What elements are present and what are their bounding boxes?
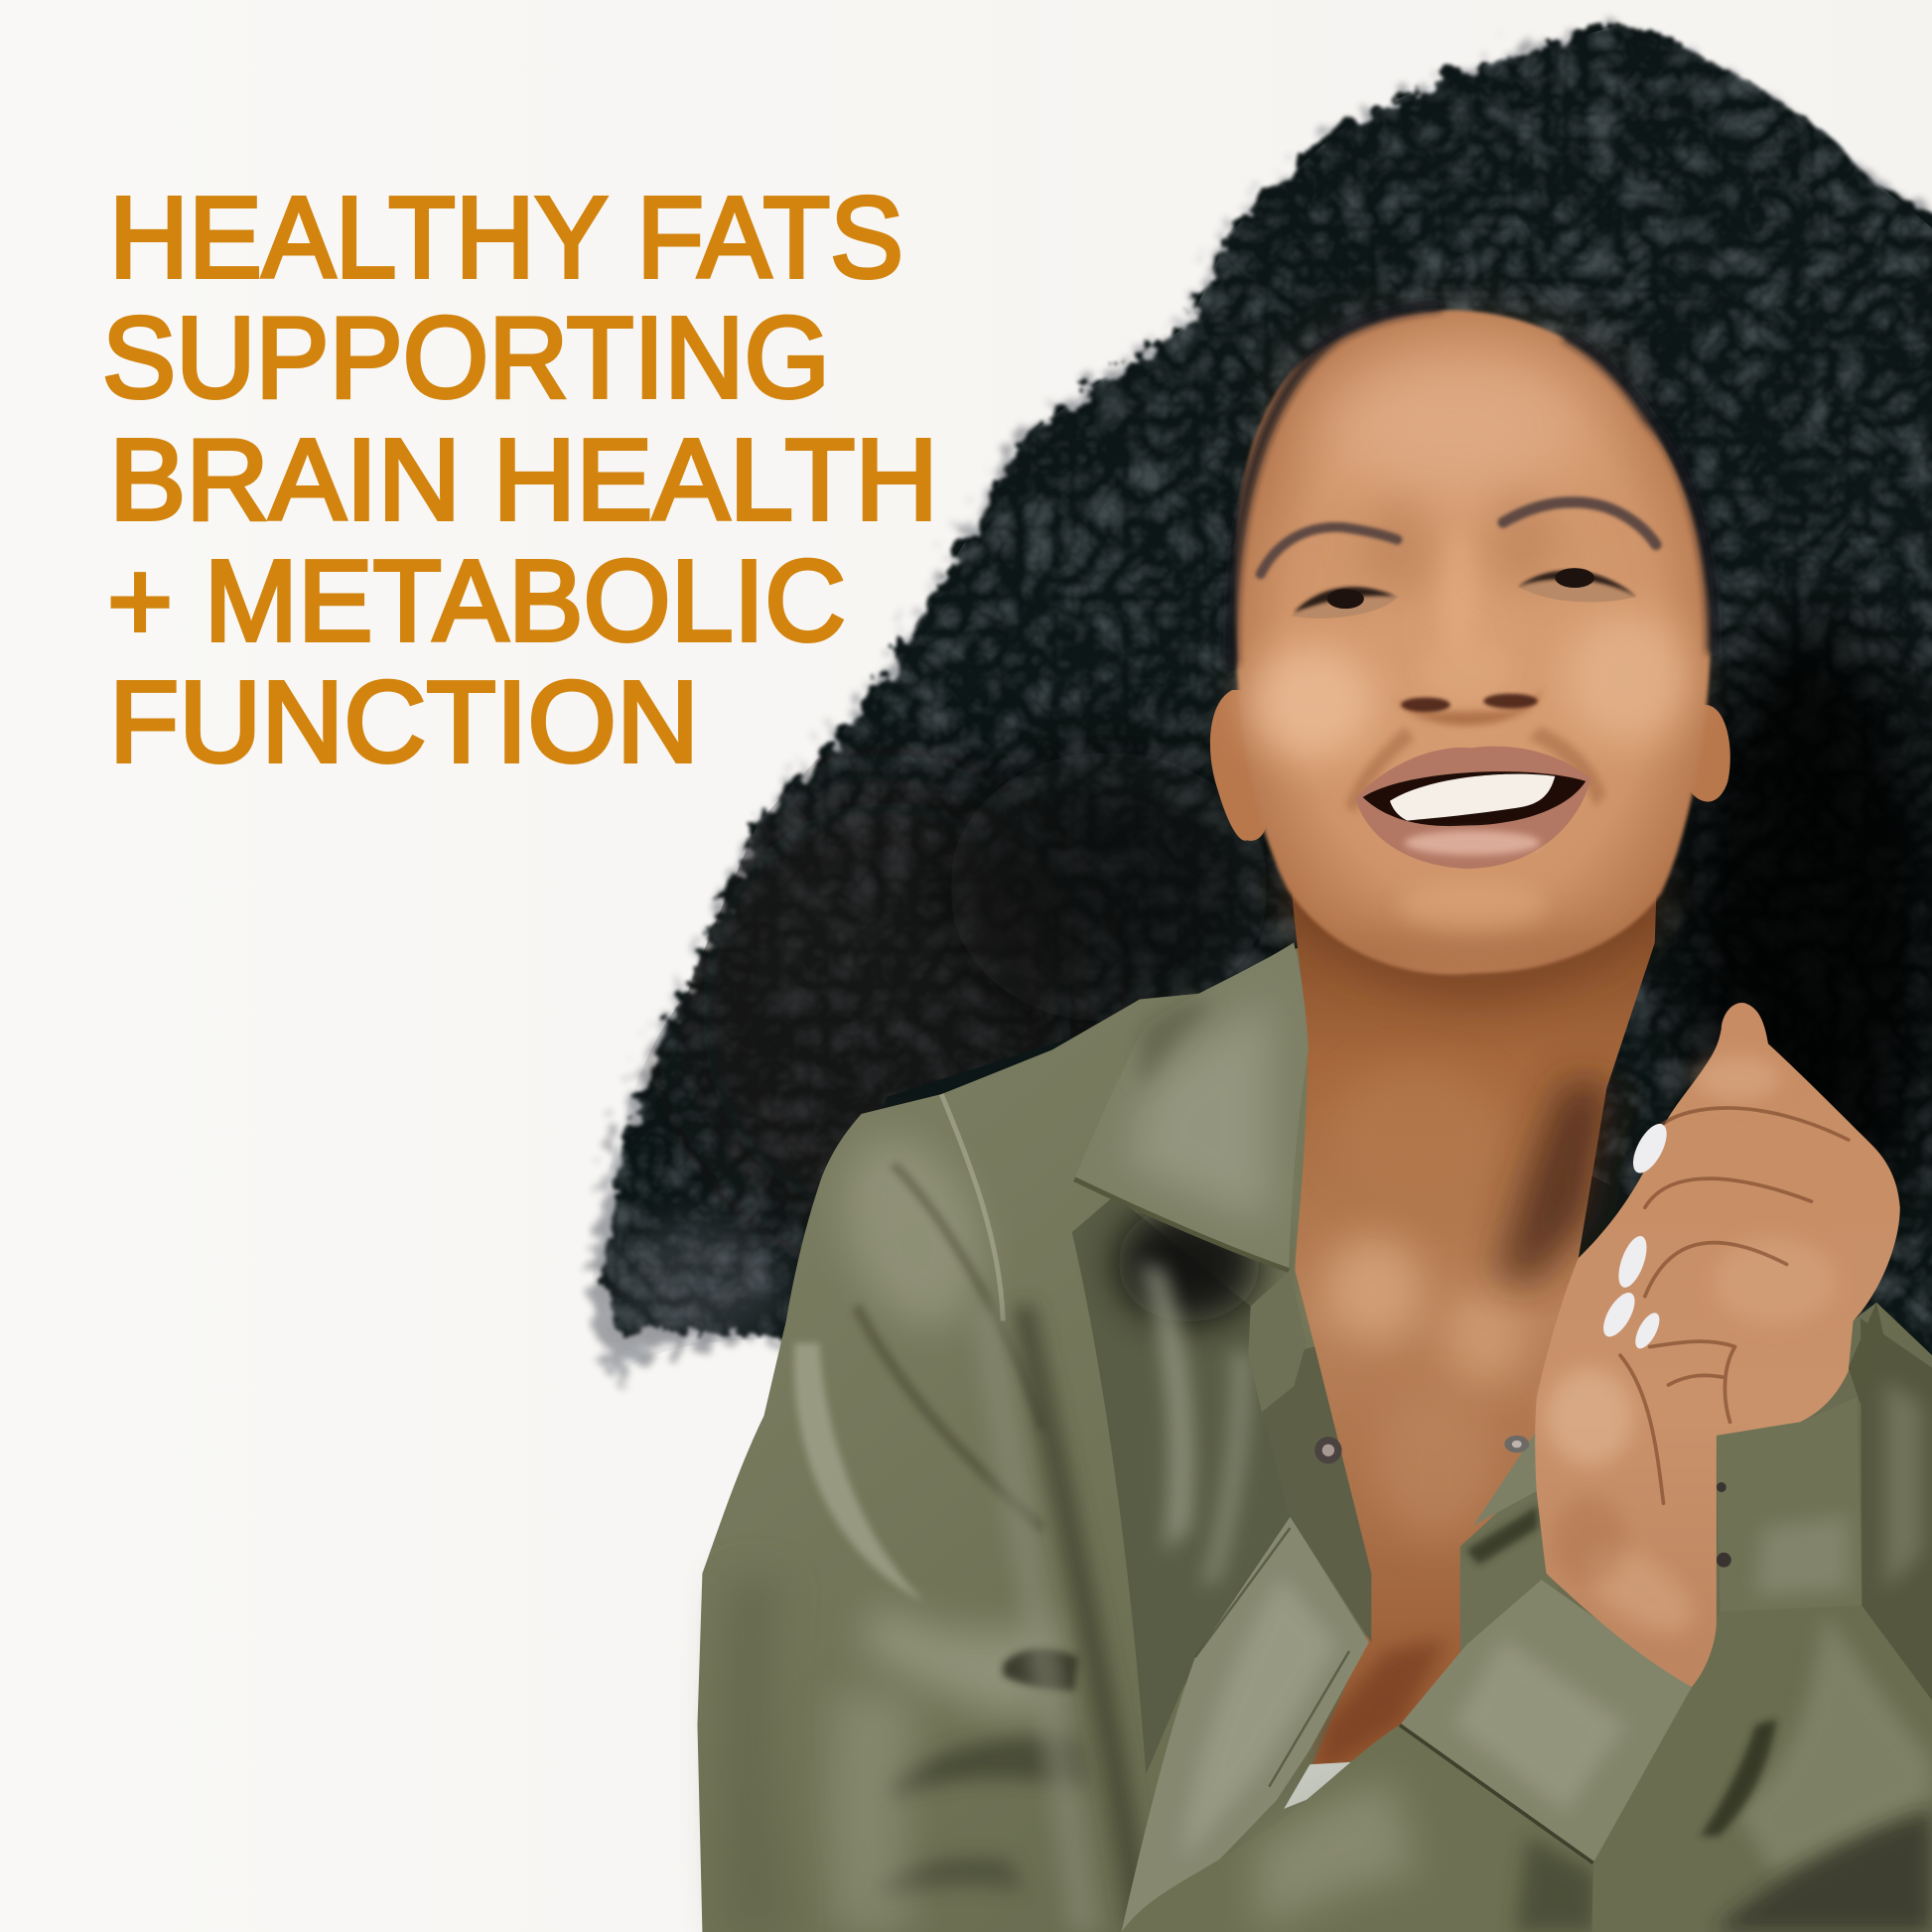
photo: smiling woman with curly hair in olive leather jacket (579, 12, 1932, 1932)
small white shirt sliver (1284, 1762, 1353, 1809)
cuff with hand inside (1717, 1303, 1885, 1611)
left ear (1210, 690, 1270, 841)
jacket body (697, 942, 1932, 1932)
cuff snaps (1717, 1482, 1731, 1568)
hand with white nails (1535, 1003, 1900, 1687)
right eye (1518, 568, 1636, 602)
headline line 4: + METABOLIC (107, 536, 846, 665)
neck shadows (1288, 863, 1657, 1001)
hand highlights (1547, 1056, 1836, 1650)
nose (1395, 642, 1543, 726)
right ear (1688, 705, 1730, 802)
left eye (1292, 587, 1399, 619)
right arm folds (1592, 1318, 1932, 1932)
left button (1314, 1437, 1342, 1463)
headline line 1: HEALTHY FATS (109, 173, 903, 302)
headline (102, 173, 938, 786)
mouth smile (1355, 747, 1590, 869)
sleeve folds and highlights (723, 1094, 1140, 1932)
left lapel panel (1121, 1347, 1529, 1932)
forearm sleeve (1121, 1725, 1595, 1932)
nails (1597, 1119, 1674, 1352)
headline line 2: SUPPORTING (102, 293, 830, 422)
face (1235, 311, 1711, 975)
hair edge over forehead (1232, 306, 1713, 665)
forearm cuff (1400, 1580, 1692, 1863)
collar (1074, 942, 1309, 1412)
inner shirt panel under collar (1072, 1195, 1290, 1774)
neck and chest skin (1288, 863, 1657, 1780)
chest highlights (1324, 1066, 1524, 1540)
eyebrows (1261, 502, 1656, 574)
right button (1504, 1436, 1529, 1452)
knuckle and finger creases (1620, 1108, 1849, 1503)
headline line 5: FUNCTION (109, 657, 699, 786)
hair (580, 14, 1932, 1392)
headline line 3: BRAIN HEALTH (109, 415, 938, 544)
skin highlights (1248, 351, 1691, 971)
right inner jacket piece (1460, 1423, 1559, 1657)
main vertical fold (1023, 1307, 1140, 1932)
